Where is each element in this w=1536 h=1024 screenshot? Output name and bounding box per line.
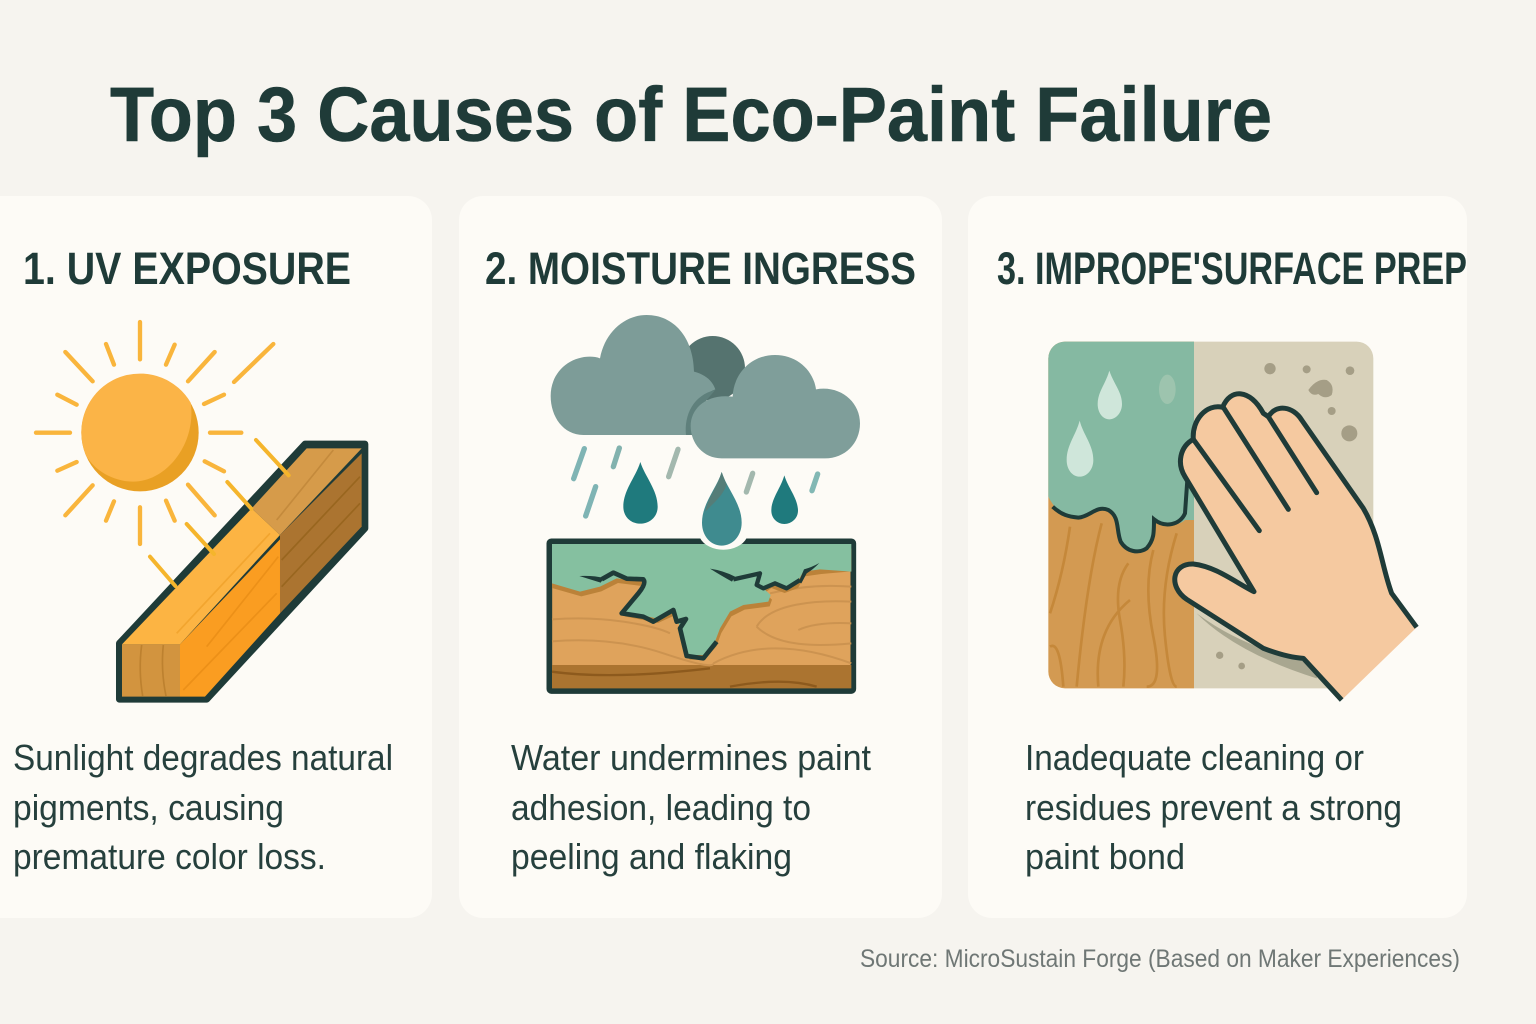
body: improper surface prep — [1025, 737, 1402, 877]
icon: rain clouds and cracked board — [549, 315, 860, 691]
body: improper surface prep: paint bond — [1025, 836, 1185, 877]
surface panel — [1048, 342, 1373, 688]
title: Top 3 Causes of Eco-Paint Failure — [110, 72, 1272, 158]
sun — [81, 374, 199, 491]
body: moisture ingress — [511, 737, 871, 877]
storm clouds — [551, 315, 860, 458]
water drops — [623, 462, 798, 524]
body: UV exposure: pigments, causing — [13, 787, 284, 828]
body: UV exposure — [13, 737, 393, 877]
panel: moisture ingress — [459, 196, 942, 918]
body: UV exposure: premature color loss. — [13, 836, 326, 877]
body: moisture ingress: Water undermines paint — [511, 737, 871, 778]
body: improper surface prep: residues prevent a strong — [1025, 787, 1402, 828]
panel: UV exposure — [0, 196, 432, 918]
body: moisture ingress: adhesion, leading to — [511, 787, 811, 828]
icon: sun and wood beam — [36, 322, 365, 699]
body: UV exposure: Sunlight degrades natural — [13, 737, 393, 778]
board — [549, 541, 853, 691]
icon: hand on prepared surface — [1048, 342, 1417, 700]
sun rays — [36, 322, 273, 544]
panel: improper surface prep — [968, 196, 1467, 918]
large drop in notch — [699, 472, 747, 550]
wood beam — [119, 444, 365, 699]
beam rays — [150, 440, 289, 586]
rain streaks — [574, 448, 818, 516]
hand — [1175, 394, 1417, 700]
heading: UV exposure: 1. UV EXPOSURE — [23, 243, 351, 294]
heading: moisture ingress: 2. MOISTURE INGRESS — [485, 243, 916, 294]
body: moisture ingress: peeling and flaking — [511, 836, 792, 877]
body: improper surface prep: Inadequate cleaning or — [1025, 737, 1364, 778]
source note: Source: MicroSustain Forge (Based on Maker Experiences) — [860, 945, 1460, 973]
